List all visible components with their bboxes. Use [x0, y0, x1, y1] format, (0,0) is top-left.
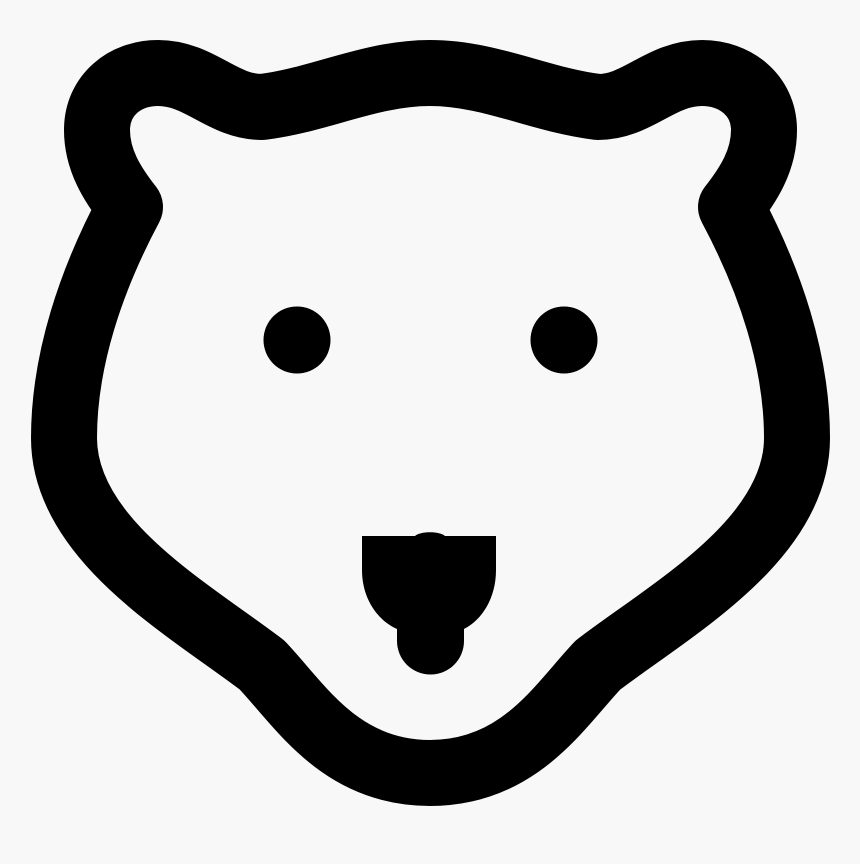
left eye: [264, 306, 330, 374]
right eye: [530, 306, 598, 374]
nose and tongue: [362, 532, 496, 674]
bear head outline: [64, 73, 797, 773]
